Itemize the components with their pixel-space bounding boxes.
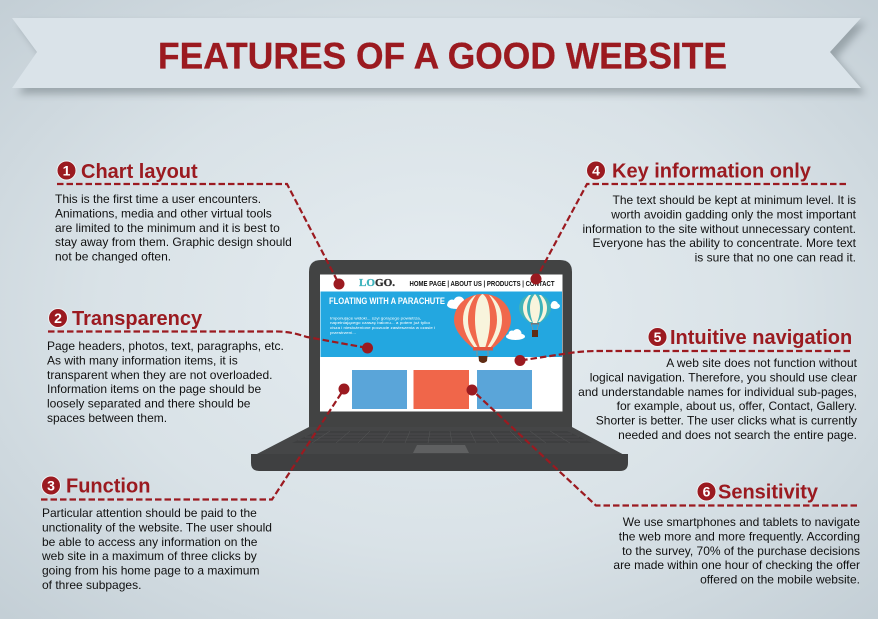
- hero text: [330, 316, 435, 335]
- text block: As with many information items, it is: [47, 353, 238, 367]
- number badge 2: 2: [54, 310, 62, 326]
- number badge 1: 1: [63, 162, 71, 178]
- text block: [613, 515, 860, 587]
- text block: and understandable names for individual sub-pages,: [578, 385, 857, 399]
- text block: of three subpages.: [42, 578, 141, 592]
- text block: offered on the mobile website.: [700, 573, 860, 587]
- text block: A web site does not function without: [666, 356, 858, 370]
- text block: be able to access any information on the: [42, 535, 258, 549]
- text block: unctionality of the website. The user should: [42, 520, 272, 534]
- hero text: napełniającego czaszę balonu... a potem już tylko: [330, 321, 430, 325]
- callout 4 connector: [530, 184, 846, 284]
- text block: Shorter is better. The user clicks what is currently: [596, 414, 857, 428]
- heading: Function: [66, 476, 150, 498]
- text block: Animations, media and other virtual tools: [55, 206, 272, 220]
- text block: web site in a maximum of three clicks by: [41, 549, 257, 563]
- text block: spaces between them.: [47, 411, 167, 425]
- text block: Particular attention should be paid to the: [42, 506, 257, 520]
- text block: transparent when they are not overloaded.: [47, 368, 272, 382]
- logo: LOGO.: [359, 278, 395, 289]
- number badge 1: [57, 161, 76, 180]
- number badge 3: 3: [47, 478, 55, 494]
- number badge 6: [697, 482, 716, 501]
- text block: Page headers, photos, text, paragraphs, etc.: [47, 339, 284, 353]
- screen: [320, 274, 562, 412]
- callout 5 connector: [514, 351, 850, 366]
- text block: We use smartphones and tablets to navigate: [623, 515, 860, 529]
- navigation: HOME PAGE | ABOUT US | PRODUCTS | CONTACT: [410, 279, 555, 288]
- callout 6 connector: [466, 384, 857, 506]
- number badge 6: 6: [703, 484, 711, 500]
- text block: [41, 506, 272, 592]
- number badge 4: [586, 161, 606, 180]
- content box right: [477, 370, 532, 409]
- hero band: [320, 292, 562, 357]
- text block: This is the first time a user encounters.: [55, 192, 261, 206]
- text block: not be changed often.: [55, 250, 171, 264]
- laptop base: [251, 427, 628, 471]
- title: FEATURES OF A GOOD WEBSITE: [158, 36, 727, 76]
- panel: key information only: [582, 160, 857, 265]
- heading: Sensitivity: [718, 482, 819, 504]
- panel: intuitive navigation: [578, 327, 858, 442]
- text block: The text should be kept at minimum level. It is: [613, 193, 856, 207]
- text block: stay away from them. Graphic design should: [55, 235, 292, 249]
- number badge 5: 5: [654, 329, 662, 345]
- laptop lid: [309, 260, 572, 427]
- text block: information to the site without unnecessary content.: [582, 222, 856, 236]
- text block: Everyone has the ability to concentrate. More text: [593, 236, 857, 250]
- callout 2 connector: [48, 331, 373, 354]
- content box left: [352, 370, 407, 409]
- text block: going from his home page to a maximum: [42, 564, 259, 578]
- text block: worth avoidin gadding only the most important: [610, 207, 857, 221]
- callout 3 connector: [41, 384, 350, 500]
- text block: [55, 192, 292, 264]
- content box middle: [414, 370, 469, 409]
- text block: [582, 193, 857, 265]
- text block: Information items on the page should be: [47, 382, 261, 396]
- panel: function: [41, 476, 272, 592]
- title banner: [12, 18, 866, 94]
- heading: Key information only: [612, 160, 812, 182]
- panel: transparency: [47, 308, 284, 425]
- hero text: Imponujące widoki... szyi gorącego powietrza,: [330, 316, 421, 320]
- small balloon: [519, 294, 551, 337]
- text block: [47, 339, 284, 425]
- text block: needed and does not search the entire page.: [618, 428, 857, 442]
- laptop illustration: [251, 260, 628, 471]
- text block: logical navigation. Therefore, you should use clear: [590, 370, 857, 384]
- number badge 3: [42, 476, 60, 495]
- text block: the web more and more frequently. According: [619, 529, 860, 543]
- text block: to the survey, 70% of the purchase decisions: [622, 544, 860, 558]
- hero heading: FLOATING WITH A PARACHUTE: [329, 296, 445, 306]
- text block: [578, 356, 858, 442]
- heading: Intuitive navigation: [670, 327, 852, 349]
- number badge 2: [48, 308, 68, 328]
- text block: are made within one hour of checking the offer: [613, 558, 860, 572]
- text block: loosely separated and there should be: [47, 397, 251, 411]
- text block: for example, about us, offer, Contact, Gallery.: [617, 399, 857, 413]
- number badge 4: 4: [592, 162, 600, 178]
- big balloon: [454, 294, 511, 363]
- hero text: cisza i niesłożenione poczucie zawieszenia w czasie i: [330, 326, 435, 330]
- text block: are limited to the minimum and it is best to: [55, 221, 280, 235]
- panel: sensitivity: [613, 482, 860, 587]
- heading: Chart layout: [81, 161, 198, 183]
- clouds: [447, 296, 560, 340]
- text block: is sure that no one can read it.: [695, 251, 856, 265]
- hero text: przestrzeni...: [330, 331, 356, 335]
- panel: chart layout: [55, 161, 292, 264]
- number badge 5: [648, 328, 667, 346]
- heading: Transparency: [72, 308, 203, 330]
- callout 1 connector: [57, 184, 344, 290]
